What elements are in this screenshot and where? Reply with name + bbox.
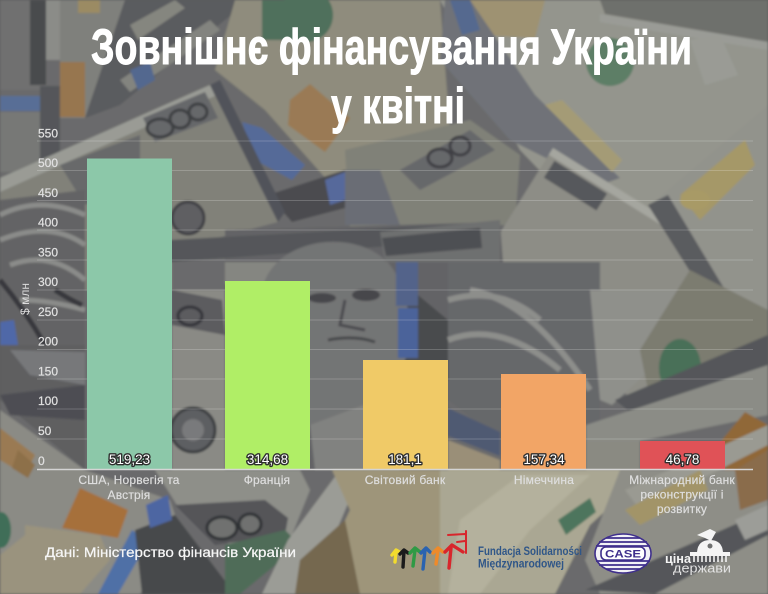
- value labels: 157,34: [523, 452, 565, 467]
- category labels: США, Норвегія та: [78, 473, 180, 487]
- y axis labels: 0: [38, 454, 45, 468]
- y axis labels: 500: [38, 156, 58, 170]
- value labels: 314,68: [247, 452, 288, 467]
- background note with seal beside first bar: [171, 290, 225, 470]
- y axis title: $ млн: [18, 283, 32, 315]
- background note lower left: [0, 345, 235, 594]
- category labels: Франція: [244, 473, 290, 487]
- logo: Fundacja Solidarności Międzynarodowej: Fundacja Solidarności: [478, 546, 582, 558]
- y axis labels: 100: [38, 394, 58, 408]
- value labels: [109, 452, 699, 467]
- bar: Міжнародний банк реконструкції і розвитку: [640, 441, 725, 469]
- category labels: Світовий банк: [365, 473, 446, 487]
- background note upper centre right: [463, 148, 765, 425]
- y axis labels: 150: [38, 364, 58, 378]
- logo: ціна держави: держави: [673, 560, 731, 576]
- category labels: Міжнародний банк: [629, 473, 735, 487]
- y axis labels: [38, 126, 58, 468]
- category labels: розвитку: [657, 502, 707, 516]
- category labels: Німеччина: [514, 473, 574, 487]
- y axis labels: 550: [38, 126, 58, 140]
- background top left corner: [0, 0, 250, 172]
- background left angled note with hundred mark: [0, 80, 285, 290]
- bar: Німеччина: [501, 374, 586, 469]
- value labels: 519,23: [109, 452, 150, 467]
- title: [91, 19, 692, 134]
- background hair and notes between bars on right: [448, 262, 768, 470]
- logo: Fundacja Solidarności Międzynarodowej: [392, 531, 582, 570]
- background note lower centre: [146, 470, 448, 594]
- logo: ціна держави: [665, 529, 731, 576]
- background upper middle tan note: [215, 0, 450, 222]
- y axis labels: 200: [38, 334, 58, 348]
- background central note with hundred and serial: [345, 120, 520, 228]
- background main portrait note: [170, 220, 505, 470]
- source note: Дані: Міністерство фінансів України: [45, 544, 296, 560]
- logo: CASE: [594, 534, 652, 574]
- gridlines: [37, 141, 753, 439]
- logo: ціна держави: ціна: [665, 551, 692, 566]
- y axis labels: 350: [38, 246, 58, 260]
- y axis labels: 300: [38, 275, 58, 289]
- background upper right large note: [440, 0, 768, 285]
- background portrait hair left: [0, 190, 85, 360]
- category labels: реконструкції і: [640, 488, 724, 502]
- logo: CASE: CASE: [605, 548, 641, 560]
- title: у квітні: [331, 78, 465, 134]
- x axis line: [37, 468, 753, 470]
- value labels: 46,78: [666, 452, 699, 467]
- bar: Світовий банк: [363, 360, 448, 469]
- category labels: [78, 473, 735, 516]
- bar: Франція: [225, 281, 310, 469]
- logo: Fundacja Solidarności Międzynarodowej: Międzynarodowej: [478, 558, 564, 570]
- y axis labels: 450: [38, 186, 58, 200]
- bar: США, Норвегія та Австрія: [87, 158, 172, 469]
- background notes lower right: [440, 425, 768, 594]
- value labels: 181,1: [388, 452, 422, 467]
- background yellow hundred note right: [648, 105, 768, 310]
- y axis labels: 50: [38, 424, 52, 438]
- y axis labels: 250: [38, 305, 58, 319]
- category labels: Австрія: [108, 488, 150, 502]
- y axis labels: 400: [38, 216, 58, 230]
